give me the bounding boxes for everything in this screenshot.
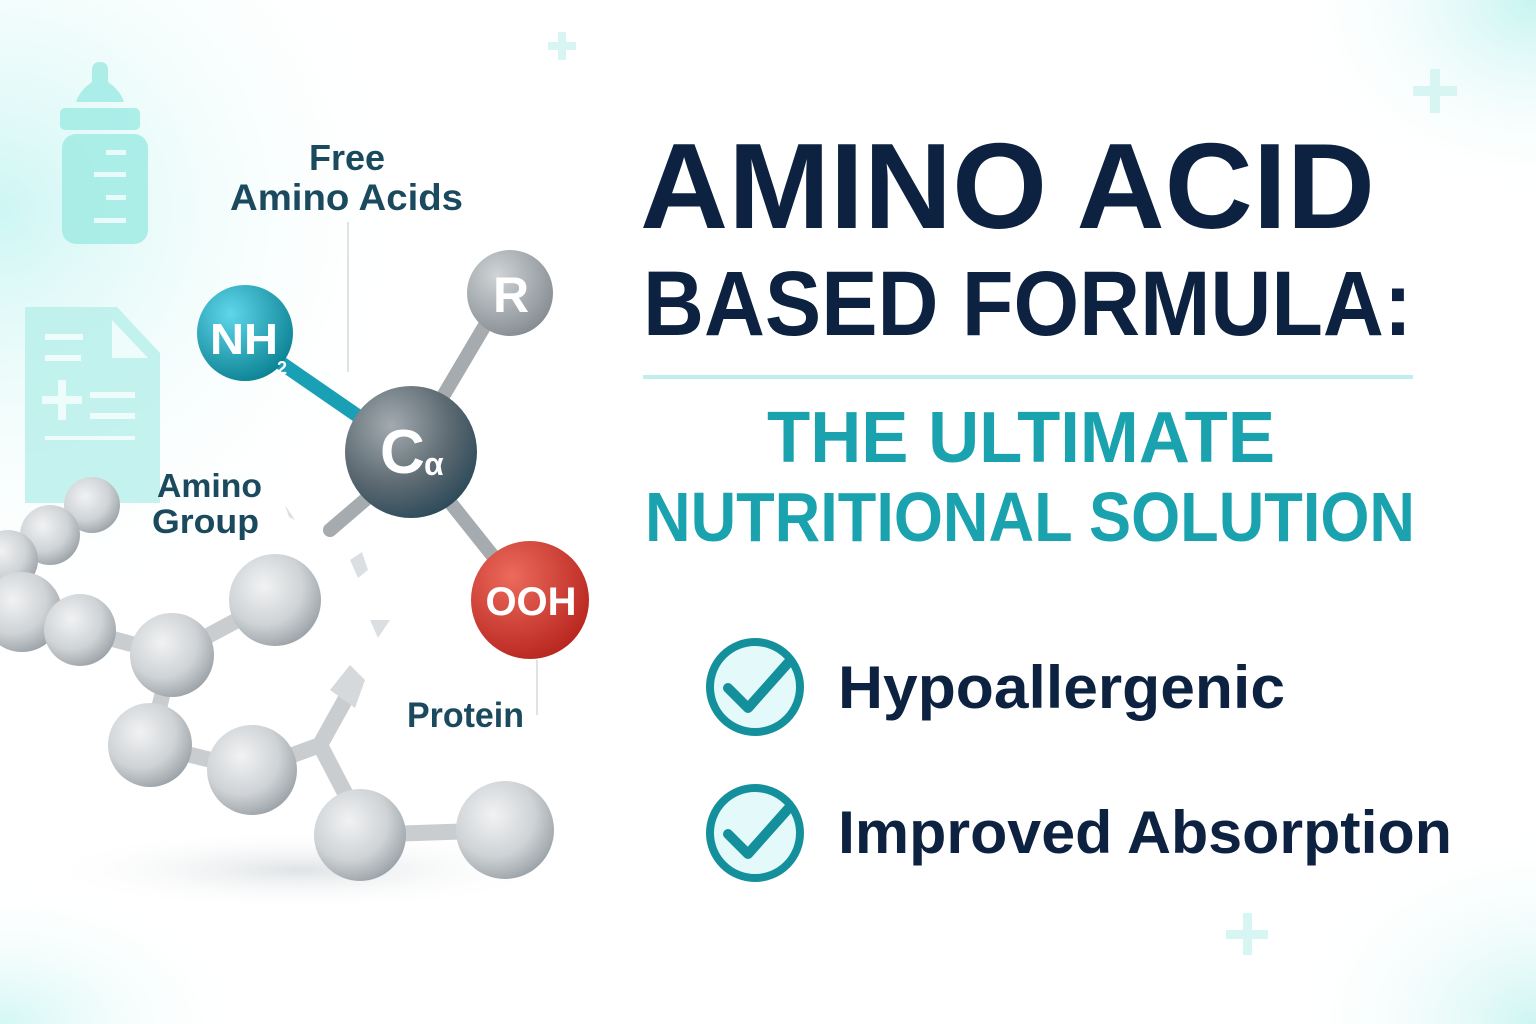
subtitle: THE ULTIMATE	[767, 398, 1275, 478]
icon: check circle	[710, 788, 800, 878]
label: Protein: Protein	[407, 696, 524, 735]
label: Amino Group: Amino	[157, 467, 262, 504]
subtitle: NUTRITIONAL SOLUTION	[645, 478, 1415, 556]
label: Free Amino Acids: Free	[309, 137, 385, 178]
ball: C alpha	[345, 386, 477, 518]
label: Free Amino Acids: Amino Acids	[230, 177, 463, 218]
protein chain	[0, 477, 554, 881]
shadow under chain	[40, 830, 560, 910]
icon: document	[25, 307, 160, 503]
ball: NH2: NH	[210, 315, 278, 364]
icon: check circle	[710, 642, 800, 732]
label: Free Amino Acids	[230, 137, 463, 372]
icon: baby bottle	[60, 62, 148, 244]
benefit: Improved Absorption	[710, 788, 1452, 878]
benefit: Hypoallergenic	[710, 642, 1285, 732]
title	[640, 118, 1412, 355]
label: Amino Group: Group	[152, 503, 259, 541]
ball: C alpha: α	[424, 446, 444, 482]
ball: NH2	[197, 285, 293, 381]
ball: R: R	[493, 267, 529, 323]
ball: C alpha: C	[380, 418, 425, 487]
ball: R	[467, 250, 553, 336]
ball: NH2: 2	[277, 358, 287, 378]
title: BASED FORMULA:	[643, 253, 1412, 355]
ball: OOH	[471, 541, 589, 659]
benefit: Hypoallergenic: Hypoallergenic	[838, 654, 1285, 721]
molecule: alpha carbon with groups	[197, 250, 589, 659]
benefit: Improved Absorption: Improved Absorption	[838, 799, 1452, 866]
ball: OOH: OOH	[485, 580, 577, 624]
title: AMINO ACID	[640, 118, 1375, 254]
label: Protein	[407, 660, 537, 735]
subtitle	[645, 398, 1415, 556]
label: Amino Group	[152, 467, 262, 541]
